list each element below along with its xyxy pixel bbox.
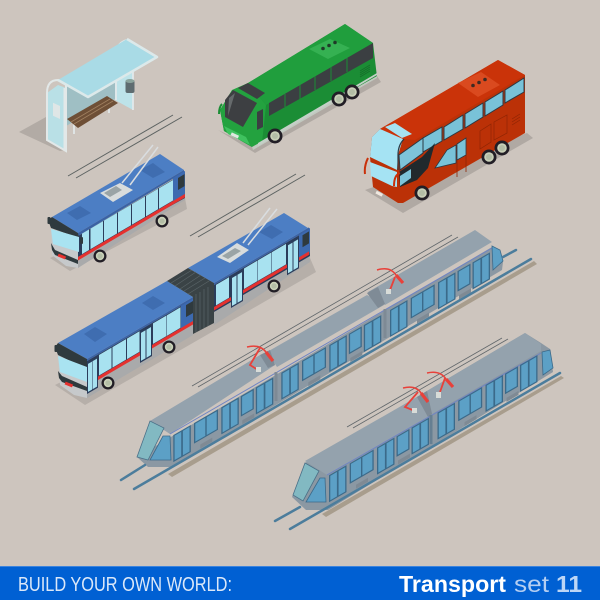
front [58,355,87,398]
bench [67,96,118,134]
banner title: Transport: Transport [399,571,506,597]
upper windows [423,78,524,152]
rails [275,373,560,529]
articulated trolleybus [54,208,316,405]
windshield [225,90,257,127]
green coach [218,24,381,153]
bus stop shelter [19,39,157,151]
pantograph 1 [403,387,428,413]
pantograph 2 [377,269,403,294]
trolleybus [48,145,187,271]
trolley poles [243,208,277,245]
bin [126,79,134,93]
vents [259,225,283,239]
banner left text: BUILD YOUR OWN WORLD: [18,574,232,596]
overhead wires: top [68,115,182,178]
footer banner [0,566,600,600]
trolley poles [122,145,158,185]
red double-decker bus [365,60,533,213]
front [51,229,78,268]
upper windscreen [370,129,403,170]
shelter roof [58,39,157,97]
lower windscreen [370,162,397,187]
tram 1 [121,230,537,489]
vents [67,206,91,220]
overhead wires [347,338,508,428]
rails [121,250,531,489]
pantograph 1 [247,346,273,372]
tram 2 [275,333,564,529]
pantograph 2 [427,372,453,398]
overhead wires: articulated [190,174,305,237]
banner title: set: set [514,571,550,597]
banner title: 11: 11 [556,571,582,597]
overhead wires [192,235,458,387]
bellows [167,268,214,334]
